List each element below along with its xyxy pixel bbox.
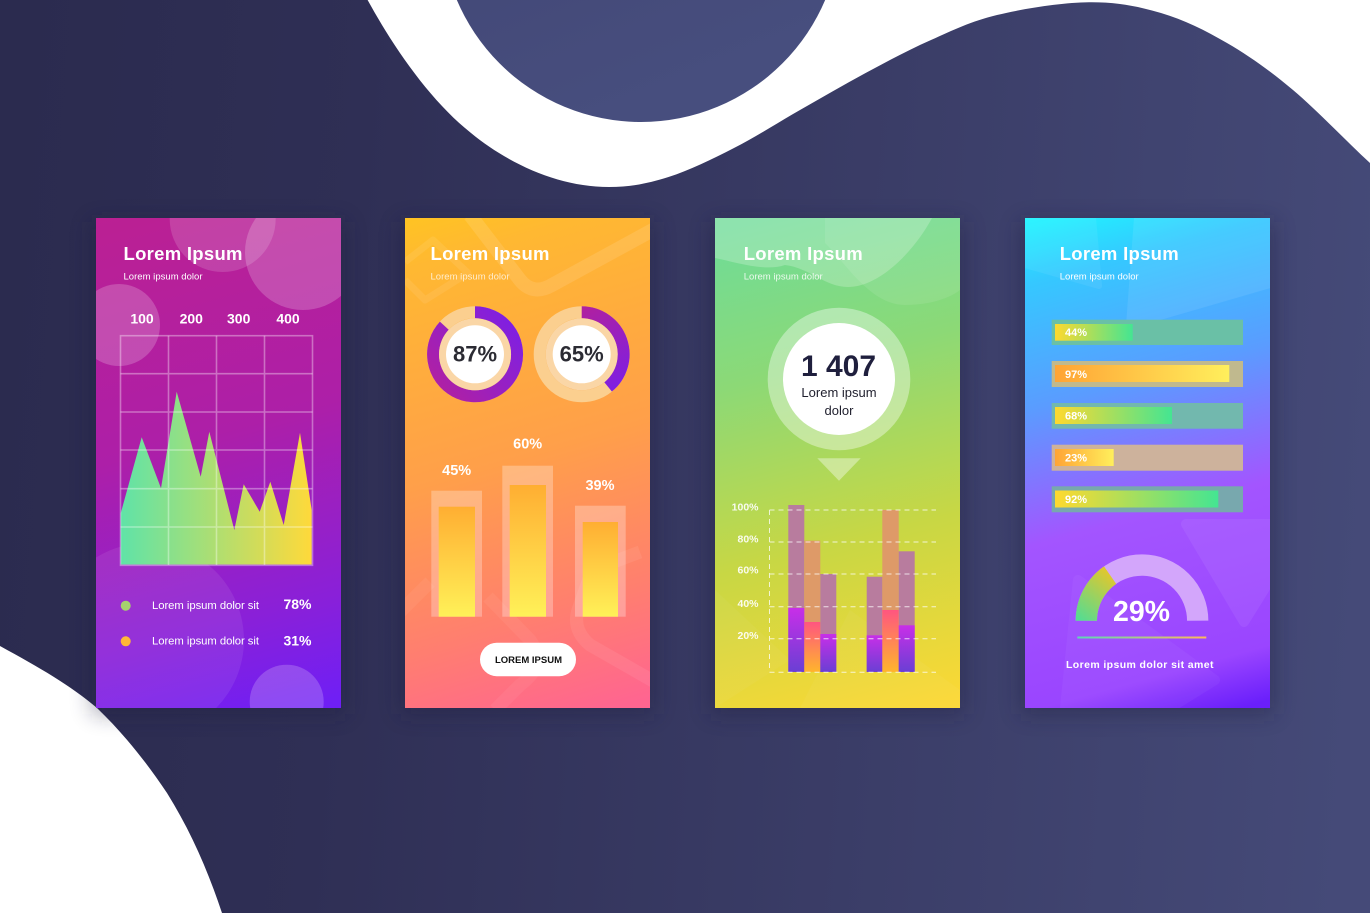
heading: Lorem Ipsum	[744, 243, 863, 264]
axis labels: 300	[227, 310, 251, 326]
axis labels: 60%	[737, 564, 759, 576]
pin marker	[768, 308, 910, 481]
heading: Lorem Ipsum	[1060, 243, 1179, 264]
legend row 2: 31%	[283, 633, 312, 649]
progress 92%	[1052, 486, 1243, 512]
chart grid	[120, 336, 312, 565]
progress 68%: 68%	[1065, 410, 1087, 422]
gauge: Lorem ipsum dolor sit amet	[1066, 659, 1214, 671]
legend row 1: Lorem ipsum dolor sit	[152, 600, 260, 612]
legend row 1	[121, 596, 312, 612]
panel: counter and stacked bars	[715, 218, 960, 708]
top semicircle	[441, 0, 841, 122]
subheading: Lorem ipsum dolor	[124, 272, 202, 282]
button: LOREM IPSUM	[495, 655, 562, 666]
pin marker: dolor	[825, 403, 854, 418]
stacked bars	[788, 505, 915, 672]
bar 39%: 39%	[585, 478, 615, 494]
subheading: Lorem ipsum dolor	[1060, 272, 1139, 282]
panel: progress bars and gauge	[1025, 218, 1270, 708]
area series	[121, 392, 312, 564]
legend row 1: 78%	[283, 596, 312, 612]
bar 60%: 60%	[513, 436, 542, 452]
bar 39%	[575, 478, 626, 617]
progress 23%: 23%	[1065, 452, 1087, 464]
panel: area chart	[96, 218, 341, 708]
progress 68%	[1052, 403, 1243, 429]
axis labels	[130, 310, 300, 326]
bar 45%: 45%	[442, 463, 471, 479]
axis labels	[732, 502, 759, 642]
legend row 2	[121, 633, 312, 649]
progress 44%	[1052, 320, 1243, 345]
gauge: 29%	[1113, 596, 1170, 628]
axis labels: 200	[180, 310, 203, 326]
axis labels: 400	[276, 310, 300, 326]
panel shadows	[92, 222, 1274, 714]
chart gridlines	[770, 510, 936, 672]
button	[480, 643, 576, 676]
progress 23%	[1052, 445, 1243, 471]
donut 65%: 65%	[560, 342, 604, 366]
gauge	[1066, 565, 1214, 671]
progress 44%: 44%	[1065, 327, 1087, 339]
bar 60%	[502, 436, 553, 617]
subheading: Lorem ipsum dolor	[430, 272, 510, 282]
bar 45%	[431, 463, 482, 617]
axis labels: 40%	[737, 598, 759, 610]
axis labels: 100	[130, 310, 154, 326]
axis labels: 80%	[737, 534, 759, 546]
pin marker: 1 407	[801, 350, 876, 383]
donut 87%: 87%	[453, 342, 497, 366]
subheading: Lorem ipsum dolor	[744, 272, 823, 282]
pin marker: Lorem ipsum	[801, 385, 877, 400]
axis labels: 20%	[737, 630, 759, 642]
heading: Lorem Ipsum	[430, 243, 550, 264]
progress 92%: 92%	[1065, 494, 1087, 506]
progress 97%: 97%	[1065, 369, 1087, 381]
panel: donuts and bars	[400, 215, 660, 710]
donut 87%	[433, 312, 517, 396]
heading: Lorem Ipsum	[124, 243, 242, 264]
donut 65%	[540, 312, 624, 396]
progress 97%	[1052, 361, 1243, 387]
axis labels: 100%	[732, 502, 759, 514]
legend row 2: Lorem ipsum dolor sit	[152, 636, 260, 648]
